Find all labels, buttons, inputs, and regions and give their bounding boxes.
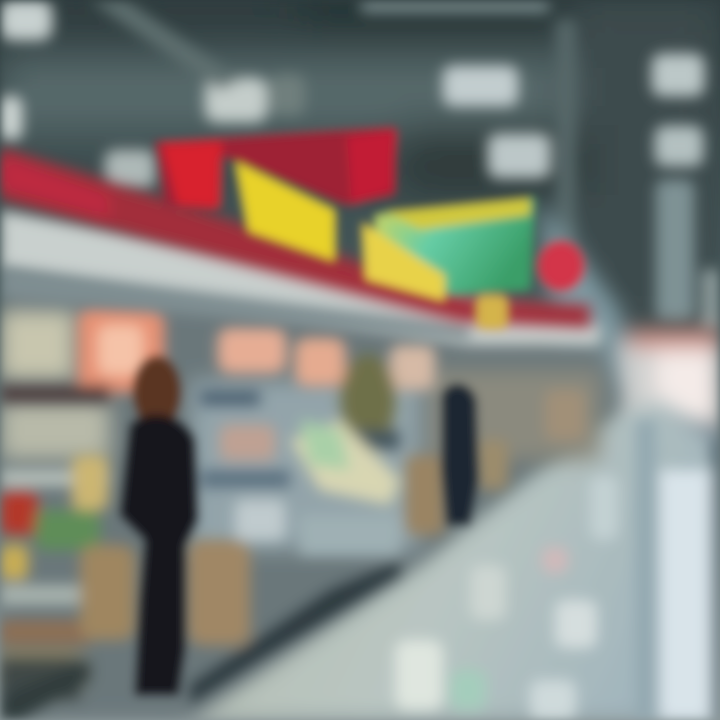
shopper, left foreground <box>120 356 198 695</box>
red banner with white shelf header <box>0 148 600 345</box>
yellow sign panel <box>235 160 335 262</box>
red round sign <box>538 241 584 291</box>
aisle side: right background <box>540 200 720 453</box>
floor <box>185 400 720 720</box>
shopper, mid aisle <box>442 384 478 525</box>
store shelves <box>0 280 620 720</box>
ceiling structure and lights <box>0 0 720 340</box>
red overhead sign <box>155 127 397 210</box>
green and yellow sign <box>362 197 535 330</box>
